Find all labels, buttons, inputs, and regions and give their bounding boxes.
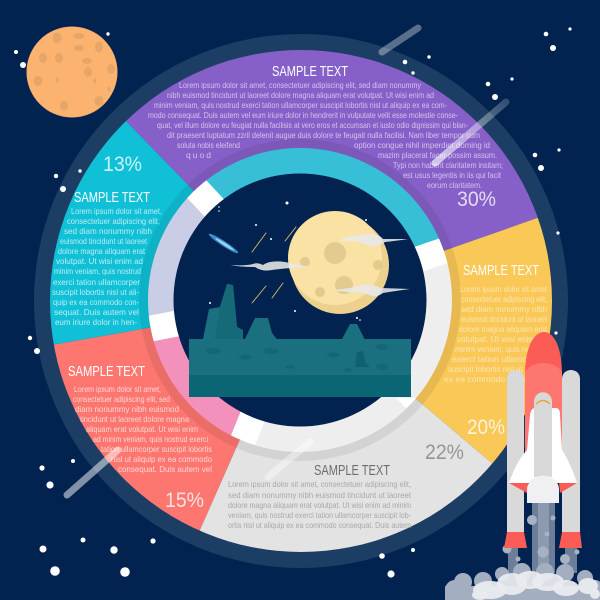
percent: 13%: 13% [103, 153, 142, 176]
heading: yellow: SAMPLE TEXT [463, 262, 539, 279]
body: purple: dit praesent luptatum zzril delenit augue duis dolore te feugait nulla facilisi. Nam liber tempor cum [167, 130, 480, 140]
body: red [73, 384, 212, 474]
body: yellow: dolore magna aliquam erat [459, 324, 548, 334]
body: yellow: sed diam nonummy nibh [461, 304, 547, 314]
body: cyan: suscipit lobortis nisl ut ali- [52, 287, 139, 297]
body: purple: soluta nobis eleifend [177, 140, 240, 150]
inner ring [148, 148, 452, 452]
body: purple: est usus legentis in iis qui facit [403, 170, 502, 180]
panel: purple text [148, 63, 503, 211]
body: red: consectetuer adipiscing elit, sed [73, 394, 170, 404]
wedge: cyan [50, 121, 194, 344]
body: purple: modo consequat. Duis autem vel eum iriure dolor in hendrerit in vulputate velit esse molestie conse- [148, 110, 458, 120]
panel: red text [68, 363, 212, 512]
exhaust puffs [502, 515, 580, 564]
body: purple: eorum claritatem. [427, 180, 482, 190]
heading: gray: SAMPLE TEXT [314, 462, 390, 479]
booster nozzles [504, 532, 527, 548]
comet in scene [207, 232, 240, 255]
panel: cyan text [52, 153, 162, 327]
rocks [203, 284, 365, 347]
heading: cyan: SAMPLE TEXT [74, 189, 150, 206]
body: red: tation ullamcorper suscipit lobortis [101, 444, 212, 454]
body: gray: Lorem ipsum dolor sit amet, consectetuer adipiscing elit, [228, 479, 411, 489]
orange arc [536, 400, 550, 404]
body: cyan: eum iriure dolor in hen- [55, 317, 137, 327]
body: cyan: minim veniam, quis nostrud [54, 266, 141, 276]
body: gray: sed diam nonummy nibh euismod tincidunt ut laoreet [228, 490, 412, 500]
body: red: Lorem ipsum dolor sit amet, [74, 384, 161, 394]
percent: 15%: 15% [165, 489, 204, 512]
moon [288, 211, 389, 314]
planet [26, 26, 118, 118]
shuttle wings [509, 483, 528, 493]
percent: 30%: 30% [457, 188, 496, 211]
body: cyan: consectetuer adipiscing elit, [67, 216, 160, 226]
body: cyan: exerci tation ullamcorper [53, 277, 140, 287]
percent: 22%: 22% [425, 441, 464, 464]
exhaust [508, 503, 577, 573]
body: cyan: sed diam nonummy nibh [64, 226, 152, 236]
body: cyan: sequat. Duis autem vel [54, 307, 139, 317]
clouds [230, 234, 410, 296]
inner ring shadow [139, 139, 461, 461]
body: red: tincidunt ut laoreet dolore magna [80, 414, 189, 424]
body: gray: ortis nisl ut aliquip ex ea commodo consequat. Duis autem [228, 520, 411, 530]
land [189, 339, 411, 397]
body: purple: q u o d [186, 150, 211, 160]
wedge: yellow [416, 218, 552, 464]
body: cyan: dolore magna aliquam erat [58, 246, 146, 256]
central tank [525, 332, 562, 453]
body: red: aliquam erat volutpat. Ut wisi enim [86, 424, 198, 434]
body: purple: nibh euismod tincidunt ut laoreet dolore magna aliquam erat volutpat. Ut wisi enim ad [167, 90, 434, 100]
body: yellow: minim veniam, quis nostrud [455, 344, 547, 354]
panel: yellow text [444, 262, 548, 439]
body: cyan: euismod tincidunt ut laoreet [60, 236, 148, 246]
body: yellow: volutpat. Ut wisi enim ad [457, 334, 547, 344]
panel: gray text [228, 441, 464, 530]
body: yellow: suscipit lobortis nisl ut aliquip [448, 364, 547, 374]
body: yellow: ex ea commodo consequat [444, 374, 548, 384]
body: gray [228, 479, 412, 530]
shuttle spine [534, 392, 552, 477]
body: red: diam nonummy nibh euismod [75, 404, 179, 414]
scene stars [209, 202, 367, 321]
body: yellow [444, 284, 548, 384]
rocket [502, 332, 582, 573]
body: red: nisl ut aliquip ex ea commodo [111, 454, 212, 464]
engine dome [527, 476, 559, 503]
heading: purple: SAMPLE TEXT [272, 63, 348, 80]
body: purple: option congue nihil imperdiet doming id [354, 140, 490, 150]
percent: 20%: 20% [467, 416, 505, 439]
meteors [252, 227, 296, 303]
body: gray: dolore magna aliquam erat volutpat. Ut wisi enim ad minim [228, 500, 411, 510]
body: yellow: Lorem ipsum dolor sit amet [460, 284, 548, 294]
body: purple: Typi non habent claritatem insitam; [393, 160, 503, 170]
comet streak: top [382, 28, 418, 52]
body: cyan: volutpat. Ut wisi enim ad [56, 256, 143, 266]
body: red: consequat. Duis autem vel [118, 464, 212, 474]
body: red: ad minim veniam, quis nostrud exerci [93, 434, 208, 444]
scene: dark circle [174, 174, 426, 426]
comet streak: gray wedge [268, 442, 310, 477]
shuttle body [509, 408, 577, 483]
body: yellow: consectetuer adipiscing elit, [461, 294, 547, 304]
body: purple: quat, vel illum dolore eu feugiat nulla facilisis at vero eros et accumsan et iusto odio dignissim qui blan- [157, 120, 468, 130]
outer ring band [34, 34, 568, 568]
body: purple: minim veniam, quis nostrud exerci tation ullamcorper suscipit lobortis nisl ut aliquip ex ea com- [154, 100, 447, 110]
body: purple: mazim placerat facer possim assum. [378, 150, 497, 160]
wedge: purple [126, 50, 538, 251]
pie wedges [50, 50, 552, 552]
wedge: red [54, 328, 240, 530]
comet streak: lower left [67, 450, 118, 495]
body: cyan: quip ex ea commodo con- [53, 297, 139, 307]
body: yellow: euismod tincidunt ut laoreet [461, 314, 548, 324]
smoke cloud [445, 563, 600, 600]
heading: red: SAMPLE TEXT [68, 363, 145, 380]
body: yellow: exerci tation ullamcorper [452, 354, 547, 364]
body: cyan [52, 206, 162, 327]
body: purple [148, 80, 503, 190]
body: cyan: Lorem ipsum dolor sit amet, [71, 206, 162, 216]
body: gray: veniam, quis nostrud exerci tation ullamcorper suscipit lob- [228, 510, 411, 520]
wedge: gray [200, 398, 492, 552]
body: purple: Lorem ipsum dolor sit amet, consectetuer adipiscing elit, sed diam nonummy [179, 80, 422, 90]
boosters [507, 370, 524, 532]
comet streak: right [435, 102, 506, 163]
